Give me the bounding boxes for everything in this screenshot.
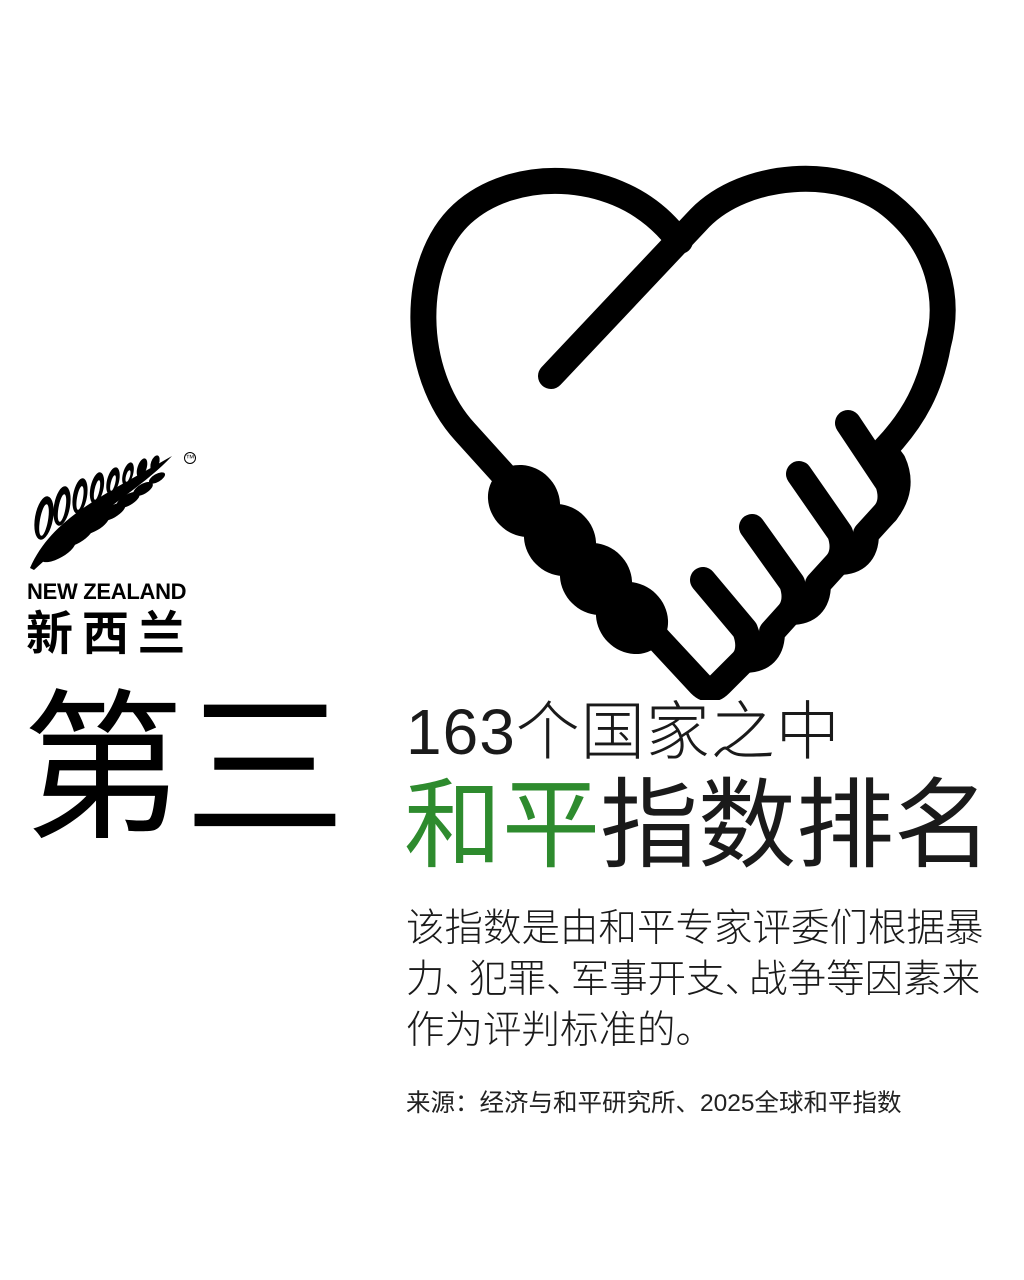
logo text: 新西兰: 新西兰 bbox=[26, 607, 194, 660]
left lobe and lower left line bbox=[423, 181, 680, 484]
big rank: 第三: 第三 bbox=[22, 679, 346, 860]
beads bbox=[473, 450, 683, 669]
diagonal arm and right lobe bbox=[551, 179, 943, 450]
logo: silver fern bbox=[30, 455, 172, 570]
paragraph: description: 该指数是由和平专家评委们根据暴 bbox=[406, 907, 984, 950]
trademark bbox=[184, 452, 196, 464]
fingers and knuckles bbox=[703, 580, 748, 660]
subtitle: 163 countries: 163个国家之中 bbox=[406, 696, 841, 768]
source note: 来源：经济与和平研究所、2025全球和平指数 bbox=[406, 1090, 902, 1117]
icon: handshake heart bbox=[410, 166, 956, 700]
paragraph: description bbox=[406, 907, 984, 1052]
headline: peace index ranking: 和平指数排名 bbox=[404, 770, 992, 880]
logo text: NEW ZEALAND: NEW ZEALAND bbox=[27, 579, 186, 604]
wrist bbox=[648, 628, 744, 689]
paragraph: description: 作为评判标准的。 bbox=[406, 1009, 714, 1052]
trademark: ™ bbox=[186, 453, 194, 463]
paragraph: description: 力、犯罪、军事开支、战争等因素来 bbox=[406, 958, 980, 1001]
